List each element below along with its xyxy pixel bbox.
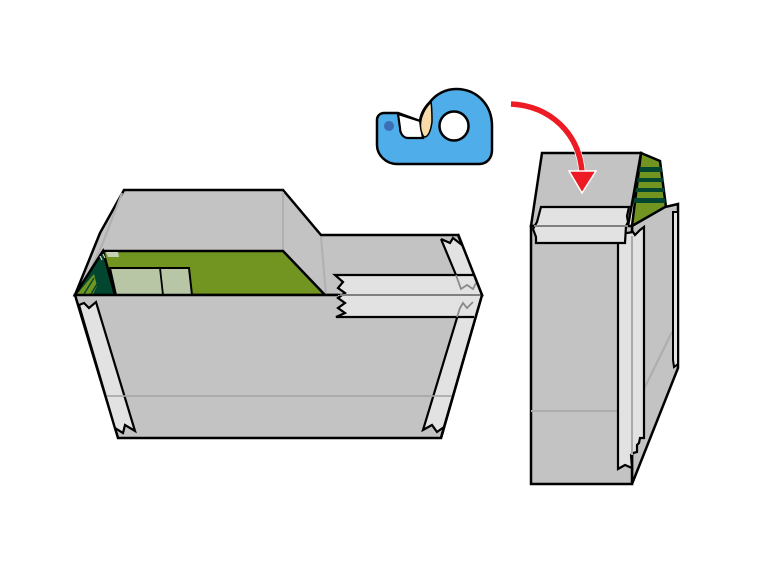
- narrow tape on right edge: [673, 212, 678, 367]
- front panel: [531, 226, 632, 484]
- outer right edge: [441, 234, 482, 438]
- box interior: green: [75, 251, 325, 295]
- button dot: [384, 121, 394, 131]
- green flap with stripes: [632, 153, 666, 226]
- right side panel: [632, 204, 678, 484]
- arrow: red curved arrow pointing to box: [511, 104, 596, 193]
- tape roll edge: [420, 102, 432, 137]
- front panel: [75, 295, 482, 438]
- dark green inner corner: [75, 251, 115, 295]
- top flap: [531, 153, 641, 226]
- right box: closed box standing: [531, 153, 678, 484]
- inner paper sheets: [110, 268, 192, 295]
- back flaps: [75, 190, 482, 295]
- tape strip: back right corner: [441, 238, 482, 295]
- hub hole: [440, 112, 468, 140]
- tape strip: right front corner: [423, 302, 480, 432]
- left box: open box with tape on corners: [75, 190, 482, 438]
- tape roll slot: [398, 114, 423, 138]
- horizontal tape: [533, 207, 629, 243]
- vertical tape: [618, 227, 644, 469]
- tape strip: across the lid: [335, 275, 482, 317]
- tape strip: left front corner: [79, 302, 135, 433]
- icon: tape dispenser: [377, 89, 492, 164]
